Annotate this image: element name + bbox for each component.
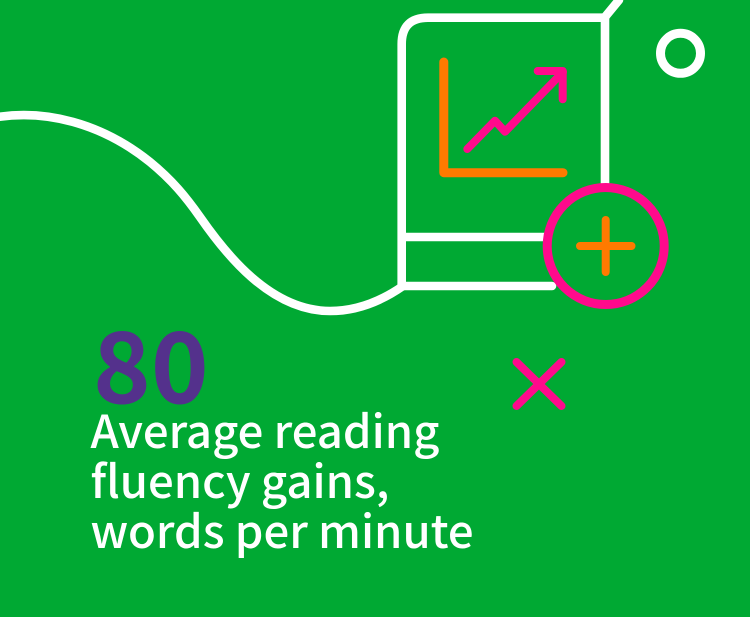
- icon: pink rising arrow: [467, 71, 563, 149]
- icon: pink circle with orange plus: [547, 188, 664, 304]
- caption text: words per minute: [90, 496, 474, 562]
- caption text: Average reading: [90, 396, 439, 462]
- icon: orange chart axes: [444, 62, 563, 173]
- icon: white ring: [660, 33, 700, 73]
- big number: 80: [93, 290, 209, 432]
- caption text: [90, 396, 474, 562]
- caption text: fluency gains,: [90, 446, 389, 512]
- icon: book outline: [402, 0, 619, 286]
- wave line: [0, 115, 403, 311]
- icon: pink cross: [516, 362, 562, 406]
